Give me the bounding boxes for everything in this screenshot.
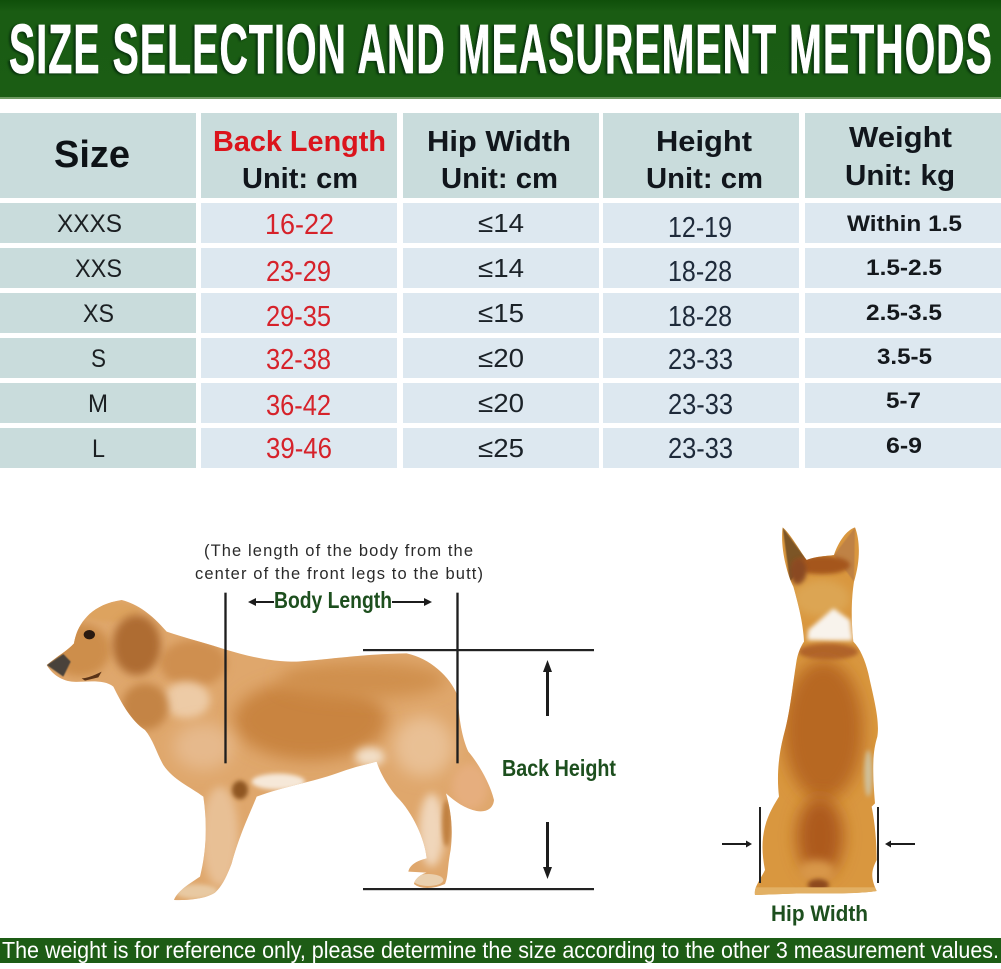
row L: 39-46 xyxy=(266,433,332,465)
row S: 3.5-5 xyxy=(877,344,932,369)
table header row: Height xyxy=(656,126,752,158)
hip width measurement xyxy=(722,807,915,926)
size table xyxy=(0,113,1001,468)
row L xyxy=(0,428,1001,468)
row M: 23-33 xyxy=(668,389,733,421)
table header row: Weight xyxy=(849,122,952,154)
row S xyxy=(0,338,1001,378)
row L: 6-9 xyxy=(886,433,922,458)
table header row: Hip Width xyxy=(427,126,571,158)
back height label: Back Height xyxy=(502,755,616,781)
row XS: 18-28 xyxy=(668,301,732,333)
table header row: Unit: cm xyxy=(441,163,558,195)
body length label with arrows: Body Length xyxy=(274,587,392,613)
row XXS xyxy=(0,248,1001,288)
row L: 23-33 xyxy=(668,433,733,465)
row L: L xyxy=(92,435,105,463)
row XXS: XXS xyxy=(75,255,122,283)
arrow: up xyxy=(543,660,552,716)
table header row: Size xyxy=(54,134,130,176)
row XXXS: XXXS xyxy=(57,210,122,238)
row M: 36-42 xyxy=(266,390,331,422)
table header row: Unit: cm xyxy=(242,163,358,195)
row M: 5-7 xyxy=(886,388,921,413)
row S: S xyxy=(91,345,106,373)
row XXS: ≤14 xyxy=(478,253,524,283)
illustration: dog side view xyxy=(46,592,494,900)
row XS: 2.5-3.5 xyxy=(866,300,942,325)
table header row: Back Length xyxy=(213,126,386,158)
line: rear marker xyxy=(456,593,459,763)
table header row xyxy=(0,113,1001,198)
arrow: left inward xyxy=(722,840,752,848)
body length note: (The length of the body from the xyxy=(204,542,473,560)
arrow: right inward xyxy=(885,840,915,848)
row XXXS xyxy=(0,203,1001,244)
row S: ≤20 xyxy=(478,343,524,373)
back height measurement xyxy=(363,649,616,890)
row XXS: 23-29 xyxy=(266,256,331,288)
row XXXS: 12-19 xyxy=(668,212,732,244)
row XXXS: 16-22 xyxy=(265,209,334,241)
hip width label: Hip Width xyxy=(771,901,868,926)
row XXS: 18-28 xyxy=(668,256,732,288)
arrow: down xyxy=(543,822,552,879)
body length note: center of the front legs to the butt) xyxy=(195,565,483,583)
row XS xyxy=(0,293,1001,333)
hip marker lines xyxy=(759,807,879,883)
row XS: ≤15 xyxy=(478,298,524,328)
row M: ≤20 xyxy=(478,388,524,418)
table header row: Unit: kg xyxy=(845,160,955,192)
line: front leg marker xyxy=(224,593,227,763)
row S: 23-33 xyxy=(668,344,733,376)
row XXS: 1.5-2.5 xyxy=(866,255,942,280)
illustration: dog back view xyxy=(750,523,883,897)
row XXXS: Within 1.5 xyxy=(847,211,962,236)
row XXXS: ≤14 xyxy=(478,208,524,238)
body length note xyxy=(195,542,483,583)
row XS: 29-35 xyxy=(266,301,331,333)
row M: M xyxy=(88,390,108,418)
row M xyxy=(0,383,1001,423)
title banner xyxy=(0,0,1001,99)
table header row: Unit: cm xyxy=(646,163,763,195)
row L: ≤25 xyxy=(478,433,524,463)
row XS: XS xyxy=(83,300,114,328)
row S: 32-38 xyxy=(266,344,331,376)
